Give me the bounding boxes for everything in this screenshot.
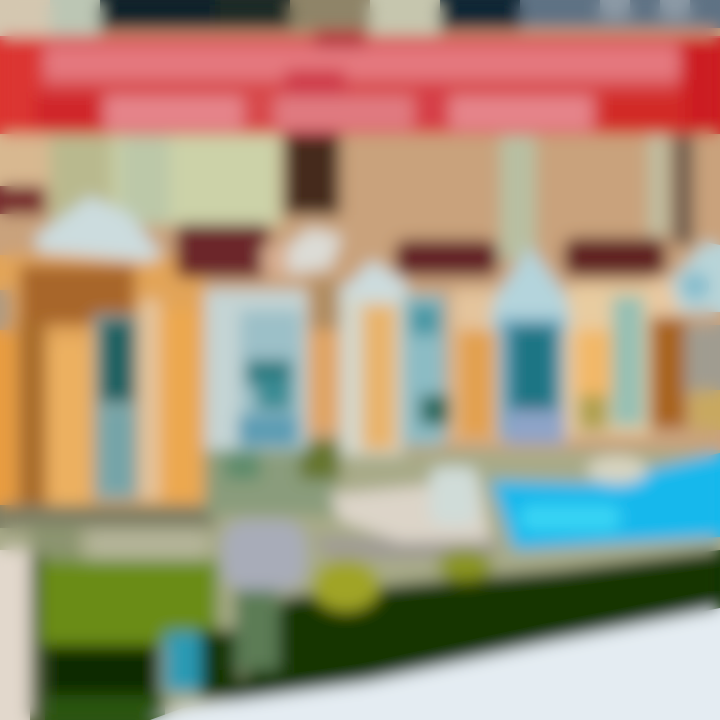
left pale pillar (0, 550, 30, 720)
door: teal glazed door (94, 315, 138, 500)
lawn: green lawn (30, 555, 240, 720)
chimney (284, 128, 340, 215)
path: pale driveway (150, 608, 720, 720)
third building (338, 260, 450, 455)
banner: red title band (lettering illegible) (0, 30, 720, 134)
roof: centre left maroon (395, 240, 498, 276)
hedge: dark diagonal hedge (230, 550, 720, 704)
roof: maroon (176, 224, 270, 278)
left building (0, 186, 205, 505)
roof: left maroon (0, 186, 45, 214)
pool deck (312, 467, 495, 560)
left wall orange (0, 255, 205, 505)
sign: blue post (165, 632, 201, 692)
statue: grey figure (222, 520, 306, 670)
pediment: white gable (34, 196, 162, 262)
roof: centre right maroon (564, 238, 666, 276)
shrub: small yellow (437, 549, 493, 581)
panel: upper wall (0, 130, 720, 260)
lawn: muted ground band (0, 440, 720, 720)
second building (176, 224, 342, 450)
white facade with teal window (205, 290, 307, 450)
fourth building with teal door (452, 246, 572, 444)
fifth building (570, 242, 720, 435)
sky and treeline strip (0, 0, 720, 42)
orange column (308, 290, 340, 430)
pool: turquoise water (490, 453, 720, 550)
small white gable (270, 228, 342, 274)
shrub: yellow green (312, 559, 380, 611)
